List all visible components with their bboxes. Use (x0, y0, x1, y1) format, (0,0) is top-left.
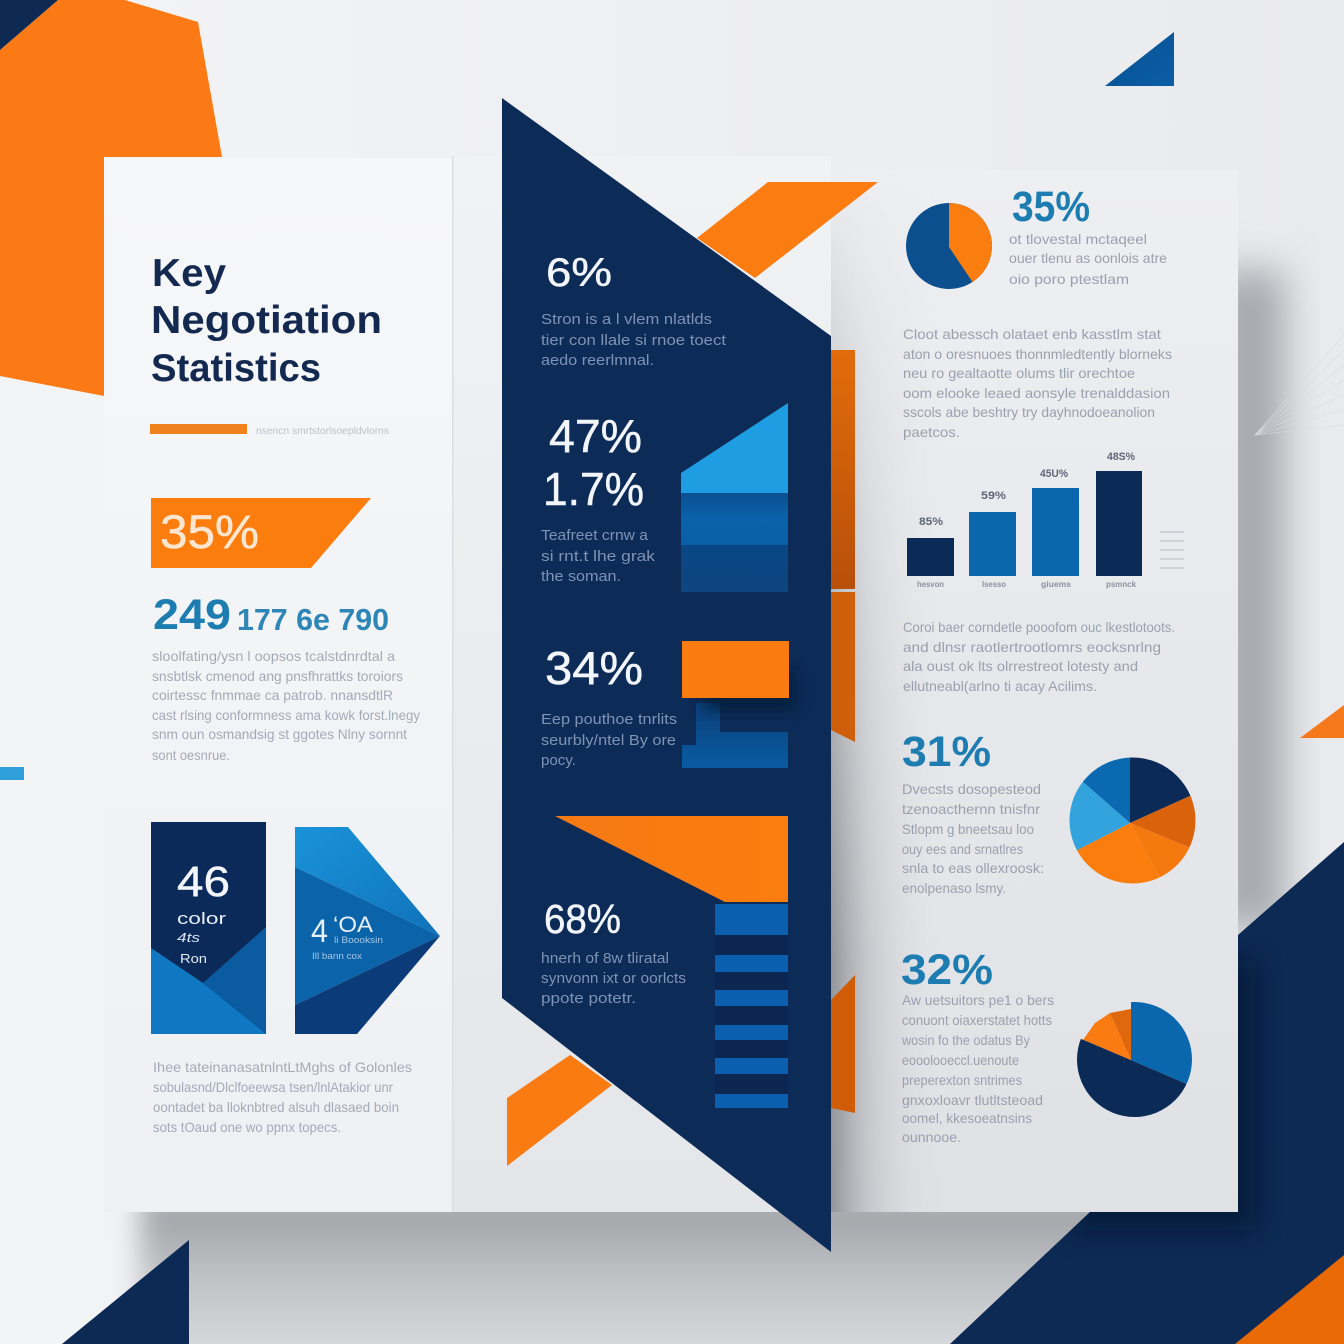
stat description (901, 992, 1054, 1145)
stat block: 32% with pie (902, 954, 1192, 1142)
card: navy and blue 46: color (177, 909, 226, 928)
stat description: ppote potetr. (541, 990, 636, 1007)
paragraph: aton o oresnuoes thonnmledtently blorneks (903, 346, 1172, 362)
card: blue arrow 4 404 (295, 827, 440, 1034)
graphic: blue stripes (715, 904, 788, 1108)
chart legend lines (1160, 532, 1184, 568)
stat value 35%: 35% (1012, 183, 1090, 231)
paragraph: ala oust ok lts olrrestreot lotesty and (903, 658, 1138, 674)
stat description (541, 311, 727, 369)
stat description: Dvecsts dosopesteod (902, 781, 1041, 797)
paragraph: ellutneabl(arlno ti acay Acilims. (903, 678, 1097, 694)
card: navy and blue 46: 46 (177, 858, 230, 906)
orange ribbon behind navy panel: bottom-left (507, 1055, 612, 1166)
right page content (902, 191, 1196, 1142)
paragraph: and dlnsr raotlertrootlomrs eocksnrlng (903, 639, 1161, 655)
navy panel shape (502, 98, 831, 1252)
stat description: ounnooe. (902, 1129, 961, 1145)
paragraph: sobulasnd/Dlclfoeewsa tsen/lnlAtakior unr (153, 1079, 393, 1095)
graphic: orange block with blue steps (682, 641, 795, 768)
bar: 59% (969, 490, 1016, 589)
bar: 59%: 59% (981, 490, 1006, 502)
paragraph: sots tOaud one wo ppnx topecs. (153, 1119, 341, 1135)
banner: 35%: 35% (160, 505, 259, 558)
shadow on navy block (1070, 960, 1255, 1230)
bar: 45% (1032, 468, 1079, 589)
stat description (902, 781, 1044, 896)
paragraph: sont oesnrue. (152, 747, 230, 763)
orange side strip: middle (831, 592, 855, 742)
orange side strip: upper (831, 350, 855, 589)
shape: bottom-right orange corner (1235, 1255, 1344, 1344)
stat description: seurbly/ntel By ore (541, 732, 676, 749)
stat description: gnxoxloavr tlutltsteoad (902, 1092, 1043, 1108)
panel: navy centre (502, 98, 831, 1252)
paragraph: Coroi baer corndetle pooofom ouc lkestlotoots. (903, 619, 1175, 635)
pie chart: five segments (1070, 758, 1196, 884)
shape: top-left navy corner (0, 0, 58, 50)
stat value 47%: 47% (549, 410, 642, 462)
graphic: orange wedge (555, 816, 788, 902)
stat description (541, 950, 686, 1007)
stat block: 6% (541, 251, 727, 369)
stat value 32%: 32% (901, 946, 993, 994)
title: Key (152, 252, 226, 295)
pie chart: three segments (1077, 1002, 1192, 1117)
bar: 48%: psmnck (1106, 580, 1137, 589)
bar: 59%: lsesso (982, 580, 1006, 589)
bar: 48%: 48S% (1107, 451, 1135, 463)
bar: 45%: 45U% (1040, 468, 1068, 480)
paragraph: oontadet ba lloknbtred alsuh dlasaed boin (153, 1099, 399, 1115)
paragraph (903, 619, 1175, 694)
stat description: preperexton sntrimes (902, 1072, 1022, 1088)
stat block: 35% with pie (906, 191, 1166, 289)
stat description: si rnt.t lhe grak (541, 548, 656, 565)
shape: top-right blue triangle (1105, 32, 1174, 86)
stat description: synvonn ixt or oorlcts (541, 970, 686, 987)
stat value 68%: 68% (544, 896, 621, 942)
shape: bottom-left navy triangle (62, 1240, 189, 1344)
bar: 85%: 85% (919, 516, 943, 528)
stat block: 31% with pie (902, 736, 1196, 896)
stat description: Eep pouthoe tnrlits (541, 711, 677, 728)
stat description (1009, 231, 1167, 287)
bar: 85% (907, 516, 954, 589)
paragraph (152, 648, 420, 763)
figures: 249 177 6e 790: 249 (153, 591, 231, 639)
bar: 85%: hesvon (917, 580, 944, 589)
orange side strip: lower (831, 975, 855, 1113)
stat description: Teafreet crnw a (541, 527, 649, 544)
card: blue arrow 4 404: li Boooksin (334, 935, 383, 945)
stat description: oio poro ptestlam (1009, 271, 1129, 287)
stat description: hnerh of 8w tliratal (541, 950, 669, 967)
paragraph: sscols abe beshtry try dayhnodoeanolion (903, 404, 1155, 420)
paragraph (153, 1059, 412, 1135)
orange ribbon behind navy panel: top (697, 182, 878, 278)
card: blue arrow 4 404: ‘OA (333, 912, 373, 937)
stat block: 68% (541, 896, 686, 1007)
stat description: ouer tlenu as oonlois atre (1009, 250, 1167, 266)
stat description: ouy ees and srnatlres (902, 841, 1023, 857)
stat description: pocy. (541, 752, 576, 769)
panel: centre page (452, 156, 831, 1212)
card: navy and blue 46 (151, 822, 266, 1034)
stat value 31%: 31% (902, 728, 991, 776)
right page inner shade (831, 230, 906, 1212)
shape: bottom-right navy block (950, 842, 1344, 1344)
panel: right page (831, 170, 1238, 1212)
orange rule (150, 424, 247, 434)
stat description: eooolooeccl.uenoute (902, 1052, 1019, 1068)
shape: left blue tab (0, 767, 24, 780)
panel: left page (104, 158, 452, 1212)
banner: 35% (151, 498, 371, 568)
stat description: Stron is a l vlem nlatlds (541, 311, 712, 328)
figures: 249 177 6e 790: 177 6e 790 (237, 602, 389, 637)
stat description: ot tlovestal mctaqeel (1009, 231, 1147, 247)
figures: 249 177 6e 790 (153, 591, 389, 639)
paragraph: sloolfating/ysn l oopsos tcalstdnrdtal a (152, 648, 395, 664)
page fold line (452, 156, 454, 1212)
title (151, 252, 382, 390)
stat value 34%: 34% (545, 642, 643, 694)
stat description: snla to eas ollexroosk: (902, 860, 1044, 876)
stat description: Stlopm g bneetsau loo (902, 821, 1034, 837)
paragraph: snsbtlsk cmenod ang pnsfhrattks toroiors (152, 668, 403, 684)
paragraph: Cloot abessch olataet enb kasstlm stat (903, 326, 1161, 342)
left page content (150, 252, 440, 1135)
card: navy and blue 46: Ron (180, 951, 207, 966)
stat description: wosin fo the odatus By (901, 1032, 1030, 1048)
paragraph: coirtessc fnmmae ca patrob. nnansdtlR (152, 687, 393, 703)
shape: top-left orange block (0, 0, 222, 396)
bar: 48% (1096, 451, 1142, 589)
stat value 1.7%: 1.7% (543, 463, 644, 515)
stat block: 34% (541, 642, 677, 769)
shape: right fan lines (1255, 335, 1344, 435)
stat description: tier con llale si rnoe toect (541, 332, 727, 349)
stat description: enolpenaso lsmy. (902, 880, 1006, 896)
graphic: stepped blue blocks (681, 403, 788, 592)
paragraph: paetcos. (903, 424, 960, 440)
stat description: conuont oiaxerstatet hotts (902, 1012, 1052, 1028)
stat description: the soman. (541, 568, 621, 585)
title: Statistics (151, 347, 321, 390)
pie chart: orange and blue (906, 203, 992, 289)
paragraph: snm oun osmandsig st ggotes Nlny sornnt (152, 726, 407, 742)
stat description: oomel, kkesoeatnsins (902, 1110, 1032, 1126)
stat description: tzenoacthernn tnisfnr (902, 801, 1040, 817)
stat description: aedo reerlmnal. (541, 352, 654, 369)
stat value 6%: 6% (546, 251, 612, 295)
page shadow beneath panels (140, 1195, 1180, 1344)
paragraph: neu ro gealtaotte olums tlir orechtoe (903, 365, 1135, 381)
paragraph: Ihee tateinanasatnlntLtMghs of Golonles (153, 1059, 412, 1075)
paragraph: cast rlsing conformness ama kowk forst.lnegy (152, 707, 420, 723)
stat description (541, 527, 656, 585)
page shadow right of panel (1215, 270, 1285, 930)
card: navy and blue 46: 4ts (177, 930, 201, 945)
card: blue arrow 4 404: 4 (311, 913, 328, 949)
shape: right orange triangle (1300, 705, 1344, 738)
stat description (541, 711, 677, 769)
bar chart (907, 451, 1184, 589)
title: Negotiation (151, 299, 382, 342)
paragraph: oom elooke leaed aonsyle trenalddasion (903, 385, 1170, 401)
card: blue arrow 4 404: Ill bann cox (312, 951, 363, 961)
subtitle: nsencn smrtstorlsoepldvlorns (256, 426, 389, 437)
paragraph (903, 326, 1172, 440)
bar: 45%: giuems (1041, 580, 1072, 589)
stat description: Aw uetsuitors pe1 o bers (902, 992, 1054, 1008)
stat block: 47% and 1.7% (541, 410, 656, 585)
